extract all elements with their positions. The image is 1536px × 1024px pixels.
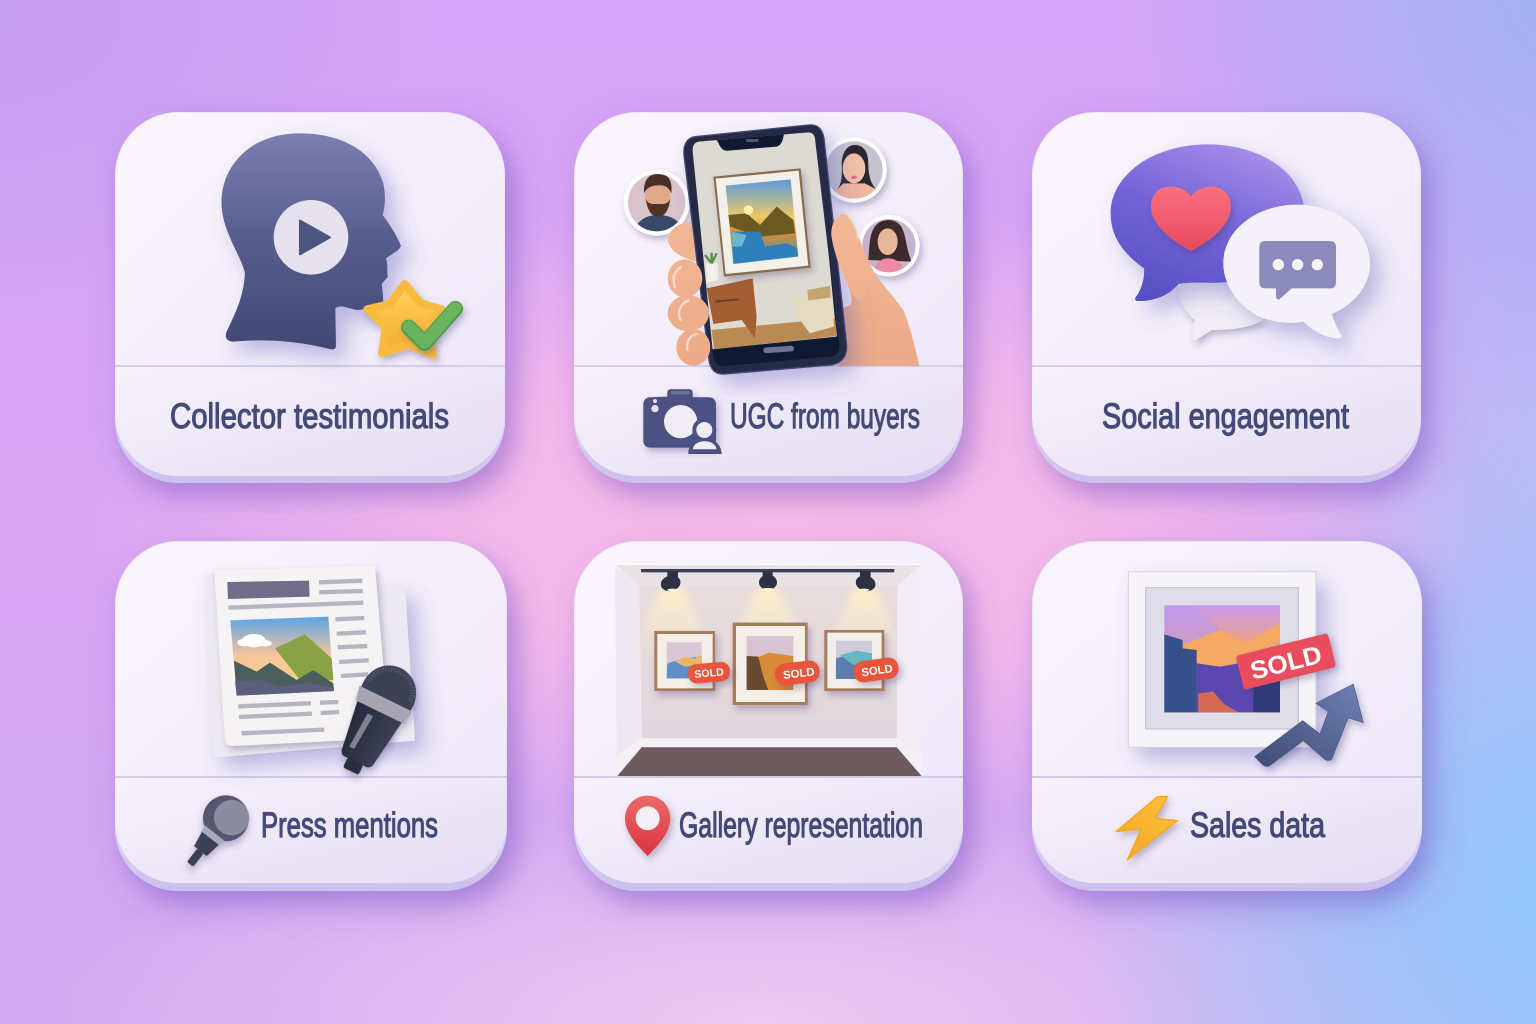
panel: UGC from buyers xyxy=(574,112,963,483)
icon: speech bubbles with heart xyxy=(1111,144,1370,341)
framed art center xyxy=(733,623,808,705)
label: Collector testimonials xyxy=(170,397,449,436)
illustration: sold painting with rising arrow xyxy=(1128,572,1363,766)
rising arrow xyxy=(1255,684,1363,766)
light cones xyxy=(630,588,903,657)
sold tags: SOLD xyxy=(694,666,725,681)
heart xyxy=(1151,187,1231,251)
icon: star with check mark xyxy=(367,284,455,355)
large white bubble xyxy=(1223,205,1370,338)
panel: press mentions xyxy=(115,541,507,891)
card base xyxy=(115,112,505,483)
framed painting on phone screen xyxy=(713,168,811,277)
hand: thumb xyxy=(831,214,875,300)
avatar: bearded man xyxy=(624,170,690,236)
illustration: gallery room xyxy=(615,564,922,776)
label: Gallery representation xyxy=(679,806,923,845)
framed art left xyxy=(654,631,715,691)
card base xyxy=(574,541,963,891)
room shell xyxy=(615,564,922,776)
label: Sales data xyxy=(1190,806,1325,845)
label: Press mentions xyxy=(261,806,438,845)
card base xyxy=(1032,541,1422,891)
small white bubble xyxy=(1178,278,1263,341)
panel: collector testimonials xyxy=(115,112,505,483)
panel: social engagement xyxy=(1032,112,1421,483)
picture frame xyxy=(1128,572,1316,747)
panel: gallery representation xyxy=(574,541,963,891)
newspaper xyxy=(204,566,415,757)
icon: small microphone xyxy=(172,786,258,878)
microphone xyxy=(324,655,427,784)
illustration: phone in hand with buyer avatars xyxy=(624,125,920,454)
icon: speaking head with play button xyxy=(222,133,401,349)
icon: map pin xyxy=(625,796,670,856)
sold tags: SOLD xyxy=(861,663,894,679)
smartphone xyxy=(684,125,847,374)
avatar: woman in pink xyxy=(858,215,920,277)
label: Social engagement xyxy=(1102,397,1349,436)
sold tags xyxy=(687,656,900,687)
hand: fingers xyxy=(668,222,710,366)
icon: lightning bolt xyxy=(1116,797,1177,860)
sold badge: SOLD xyxy=(1248,641,1325,686)
panel: sales data xyxy=(1032,541,1422,891)
card base xyxy=(574,112,963,483)
sold tags: SOLD xyxy=(782,666,815,682)
purple bubble xyxy=(1111,144,1304,301)
avatar: woman with long hair xyxy=(821,137,887,203)
illustration: newspaper with microphone xyxy=(204,566,427,784)
track lights xyxy=(641,569,894,593)
sold badge xyxy=(1236,633,1336,690)
newspaper photo xyxy=(230,617,334,696)
mini chat icon xyxy=(1259,241,1336,299)
card base xyxy=(1032,112,1421,483)
hand: palm xyxy=(837,263,919,366)
framed art right xyxy=(824,630,884,691)
label: UGC from buyers xyxy=(730,397,920,436)
card base xyxy=(115,541,507,891)
icon: camera with person badge xyxy=(643,389,722,454)
